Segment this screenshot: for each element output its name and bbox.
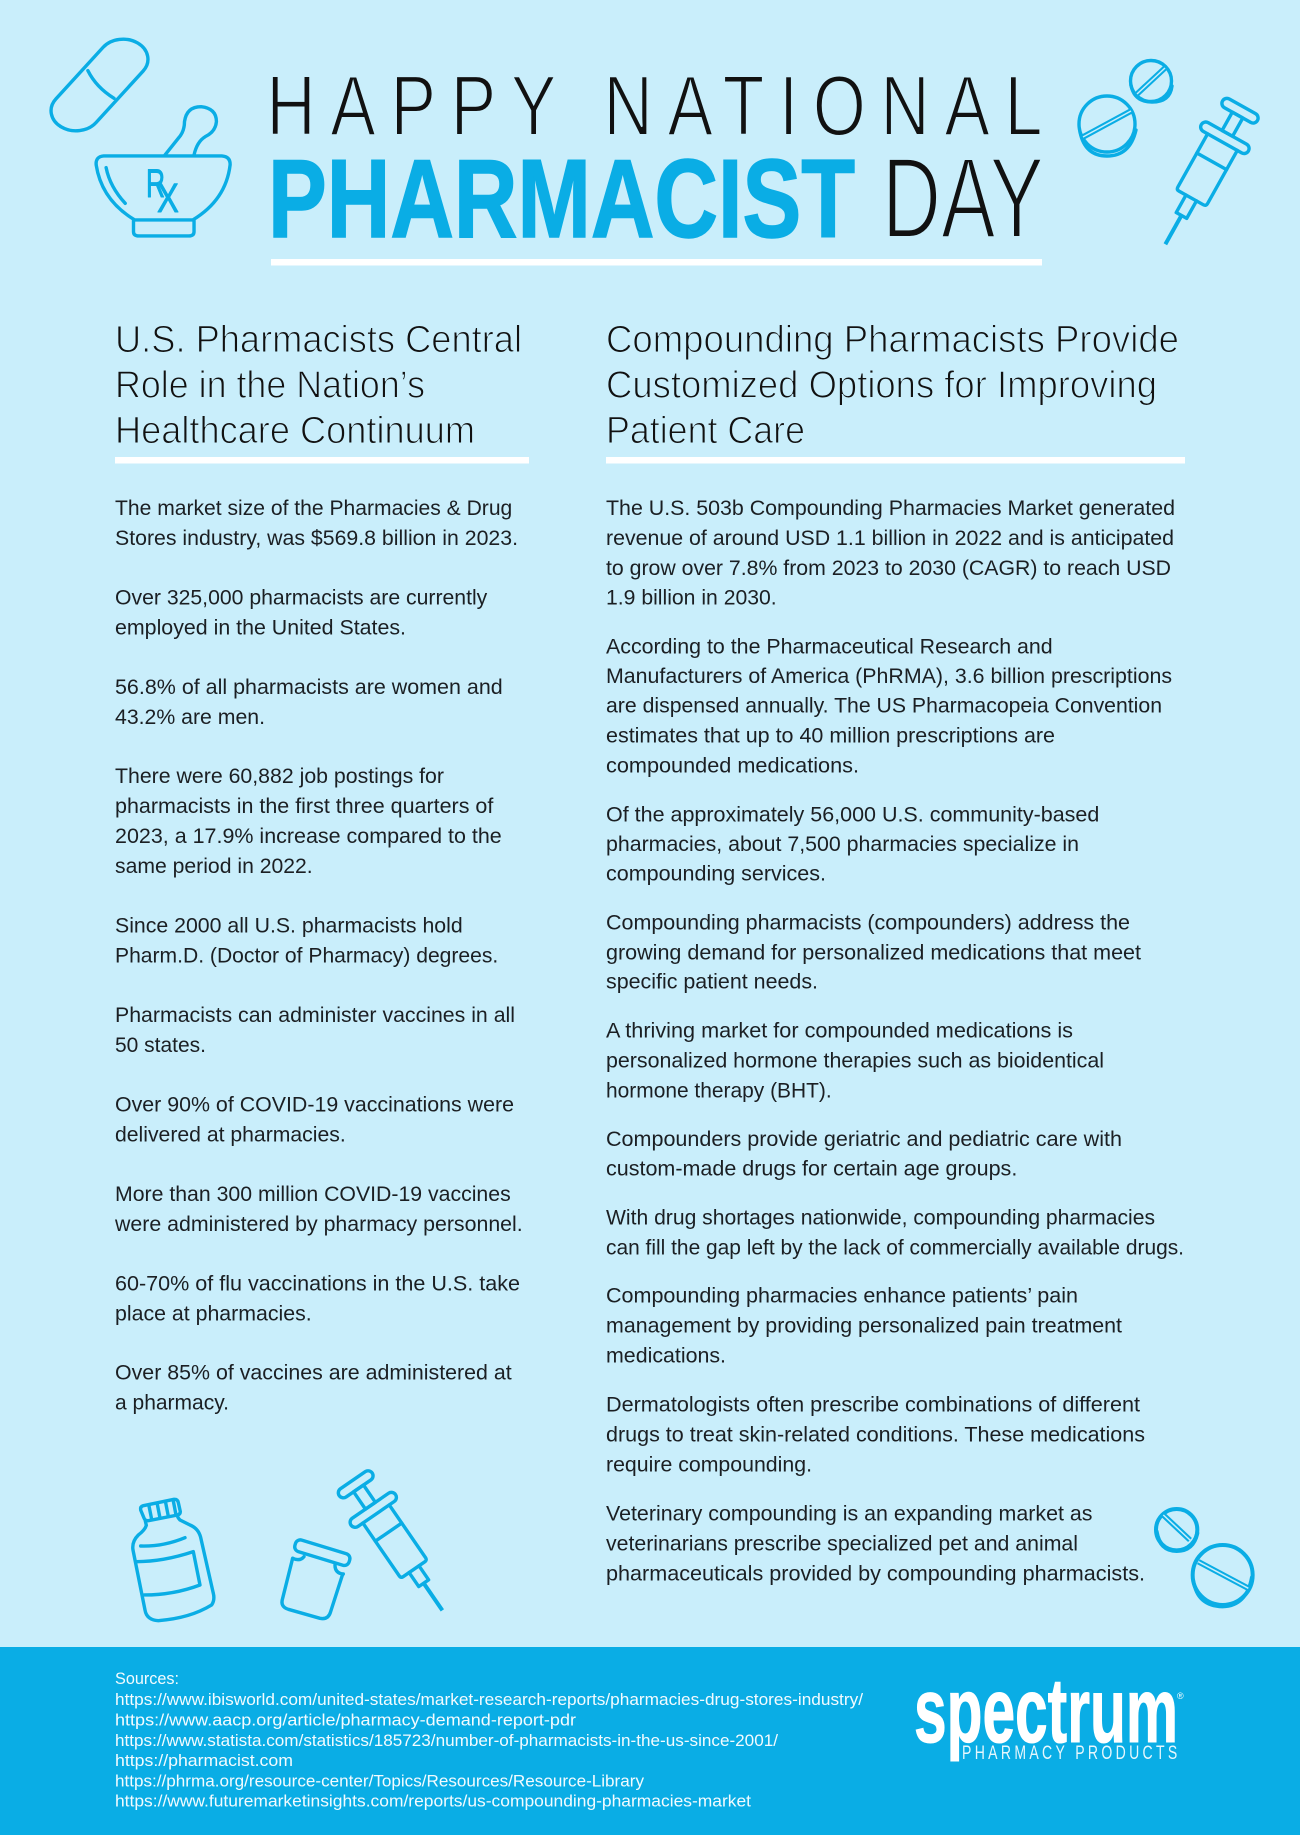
text: drug shortages: can fill the gap left by the lack of commercially available drugs. [606, 1236, 1184, 1259]
text: degrees [115, 915, 498, 968]
text: veterinary: pharmaceuticals provided by compounding pharmacists. [606, 1562, 1145, 1586]
icon: bottle [133, 1499, 214, 1621]
text: sources [115, 1669, 863, 1810]
text: 85 percent of vaccines [115, 1362, 512, 1415]
text: geriatric and pediatric: Compounders provide geriatric and pediatric care with [606, 1128, 1122, 1151]
text: market size: Stores industry, was $569.8 billion in 2023. [115, 527, 518, 550]
text: job postings: There were 60,882 job postings for [115, 765, 444, 788]
heading: right column [606, 319, 1179, 452]
title [266, 59, 1044, 262]
logo: Spectrum Pharmacy Products: ® [1177, 1691, 1184, 1701]
heading: left column: U.S. Pharmacists Central [115, 319, 522, 361]
icon: mortar and pestle with Rx: X [157, 174, 179, 221]
text: 85 percent of vaccines: Over 85% of vaccines are administered at [115, 1362, 512, 1385]
text: hormone therapies: A thriving market for compounded medications is [606, 1020, 1073, 1043]
text: employed pharmacists: Over 325,000 pharmacists are currently [115, 586, 488, 609]
text: prescriptions: Manufacturers of America (PhRMA), 3.6 billion prescriptions [606, 665, 1172, 688]
text: personalized demand: growing demand for personalized medications that meet [606, 941, 1141, 964]
logo: Spectrum Pharmacy Products [914, 1660, 1184, 1764]
text: 300 million vaccines: More than 300 million COVID-19 vaccines [115, 1183, 511, 1206]
text: personalized demand [606, 911, 1141, 994]
text: job postings [115, 765, 502, 878]
text: geriatric and pediatric [606, 1128, 1122, 1181]
text: prescriptions: estimates that up to 40 million prescriptions are [606, 725, 1055, 748]
text: sources: https://www.aacp.org/article/pharmacy-demand-report-pdr [115, 1710, 576, 1730]
text: dermatology: Dermatologists often prescribe combinations of different [606, 1394, 1140, 1417]
text: geriatric and pediatric: custom-made drugs for certain age groups. [606, 1158, 1017, 1181]
text: COVID vaccinations: delivered at pharmacies. [115, 1123, 346, 1146]
text: drug shortages: With drug shortages nationwide, compounding pharmacies [606, 1206, 1155, 1229]
icon: capsule [41, 31, 158, 139]
text: personalized demand: specific patient needs. [606, 971, 818, 994]
text: COVID vaccinations [115, 1093, 514, 1146]
panel: right column [606, 319, 1185, 1586]
text: prescriptions [606, 635, 1172, 778]
icon: tablets top right [1079, 60, 1172, 156]
text: gender split [115, 676, 503, 729]
title: HAPPY NATIONAL [266, 59, 1043, 154]
text: hormone therapies [606, 1020, 1104, 1102]
panel: footer band [0, 1647, 1300, 1835]
text: sources: https://pharmacist.com [115, 1751, 293, 1770]
logo: Spectrum Pharmacy Products: PHARMACY PRODUCTS [962, 1742, 1177, 1764]
heading: left column: Healthcare Continuum [115, 410, 475, 452]
text: vaccines in 50 states [115, 1004, 515, 1057]
text: job postings: pharmacists in the first three quarters of [115, 795, 493, 818]
text: employed pharmacists [115, 586, 488, 639]
text: market size [115, 497, 518, 550]
text: degrees: Since 2000 all U.S. pharmacists hold [115, 915, 463, 938]
icon: jar [282, 1539, 351, 1619]
text: 85 percent of vaccines: a pharmacy. [115, 1392, 229, 1415]
text: gender split: 56.8% of all pharmacists are women and [115, 676, 503, 699]
icon: tablets bottom right [1156, 1509, 1253, 1607]
text: sources: https://www.ibisworld.com/united-states/market-research-reports/pharmacies-drug-stores-industry/ [115, 1690, 863, 1709]
text: 503b market [606, 497, 1175, 609]
text: sources: https://www.futuremarketinsights.com/reports/us-compounding-pharmacies-market [115, 1792, 751, 1810]
text: sources: Sources: [115, 1669, 179, 1688]
text: flu vaccinations: place at pharmacies. [115, 1302, 312, 1325]
text: hormone therapies: personalized hormone therapies such as bioidentical [606, 1049, 1104, 1072]
text: flu vaccinations [115, 1272, 520, 1325]
heading: left column: Role in the Nation’s [115, 364, 425, 406]
text: 503b market: revenue of around USD 1.1 billion in 2022 and is anticipated [606, 527, 1174, 550]
title: DAY [882, 134, 1044, 262]
text: veterinary [606, 1502, 1145, 1586]
text: job postings: same period in 2022. [115, 855, 313, 878]
text: flu vaccinations: 60-70% of flu vaccinations in the U.S. take [115, 1272, 520, 1295]
text: 503b market: 1.9 billion in 2030. [606, 586, 777, 609]
text: vaccines in 50 states: Pharmacists can administer vaccines in all [115, 1004, 515, 1027]
text: personalized demand: Compounding pharmacists (compounders) address the [606, 911, 1130, 934]
title: PHARMACIST [268, 137, 855, 261]
heading: right column: Patient Care [606, 410, 805, 452]
heading: left column [115, 319, 522, 452]
text: 300 million vaccines [114, 1183, 523, 1236]
text: veterinary: Veterinary compounding is an expanding market as [606, 1502, 1092, 1526]
text: drug shortages [606, 1206, 1184, 1259]
icon: syringe bottom [331, 1465, 465, 1626]
text: 503b market: to grow over 7.8% from 2023 to 2030 (CAGR) to reach USD [606, 557, 1171, 580]
text: pain management: medications. [606, 1345, 726, 1368]
text: prescriptions: are dispensed annually. The US Pharmacopeia Convention [606, 695, 1162, 718]
text: dermatology [606, 1394, 1145, 1477]
text: employed pharmacists: employed in the United States. [115, 616, 406, 639]
text: prescriptions: compounded medications. [606, 755, 859, 778]
text: 503b market: The U.S. 503b Compounding Pharmacies Market generated [606, 497, 1175, 520]
icon: syringe top right [1142, 93, 1266, 257]
text: community pharmacies: Of the approximately 56,000 U.S. community-based [606, 804, 1099, 827]
text: community pharmacies: pharmacies, about 7,500 pharmacies specialize in [606, 833, 1079, 856]
text: COVID vaccinations: Over 90% of COVID-19 vaccinations were [115, 1093, 514, 1116]
panel: left column [114, 319, 529, 1415]
icon: mortar and pestle with Rx: R [146, 162, 165, 206]
heading: right column: Compounding Pharmacists Provide [606, 319, 1179, 361]
text: market size: The market size of the Pharmacies & Drug [115, 497, 512, 520]
text: dermatology: require compounding. [606, 1454, 812, 1477]
text: pain management: Compounding pharmacies enhance patients’ pain [606, 1285, 1078, 1308]
text: job postings: 2023, a 17.9% increase compared to the [115, 825, 502, 848]
text: hormone therapies: hormone therapy (BHT). [606, 1079, 832, 1102]
icon: mortar and pestle with Rx [96, 107, 230, 236]
text: veterinary: veterinarians prescribe specialized pet and animal [606, 1532, 1078, 1556]
text: sources: https://www.statista.com/statistics/185723/number-of-pharmacists-in-the-us-since-2001/ [115, 1731, 778, 1750]
text: community pharmacies [606, 804, 1099, 886]
text: community pharmacies: compounding services. [606, 863, 826, 886]
text: 300 million vaccines: were administered by pharmacy personnel. [114, 1213, 523, 1236]
text: sources: https://phrma.org/resource-center/Topics/Resources/Resource-Library [115, 1772, 644, 1790]
text: gender split: 43.2% are men. [115, 706, 265, 729]
text: degrees: Pharm.D. (Doctor of Pharmacy) degrees. [115, 945, 498, 968]
text: prescriptions: According to the Pharmaceutical Research and [606, 635, 1053, 658]
text: vaccines in 50 states: 50 states. [115, 1034, 206, 1057]
text: pain management: management by providing personalized pain treatment [606, 1315, 1122, 1338]
text: dermatology: drugs to treat skin-related conditions. These medications [606, 1424, 1145, 1447]
heading: right column: Customized Options for Improving [606, 364, 1157, 406]
text: pain management [606, 1285, 1122, 1368]
